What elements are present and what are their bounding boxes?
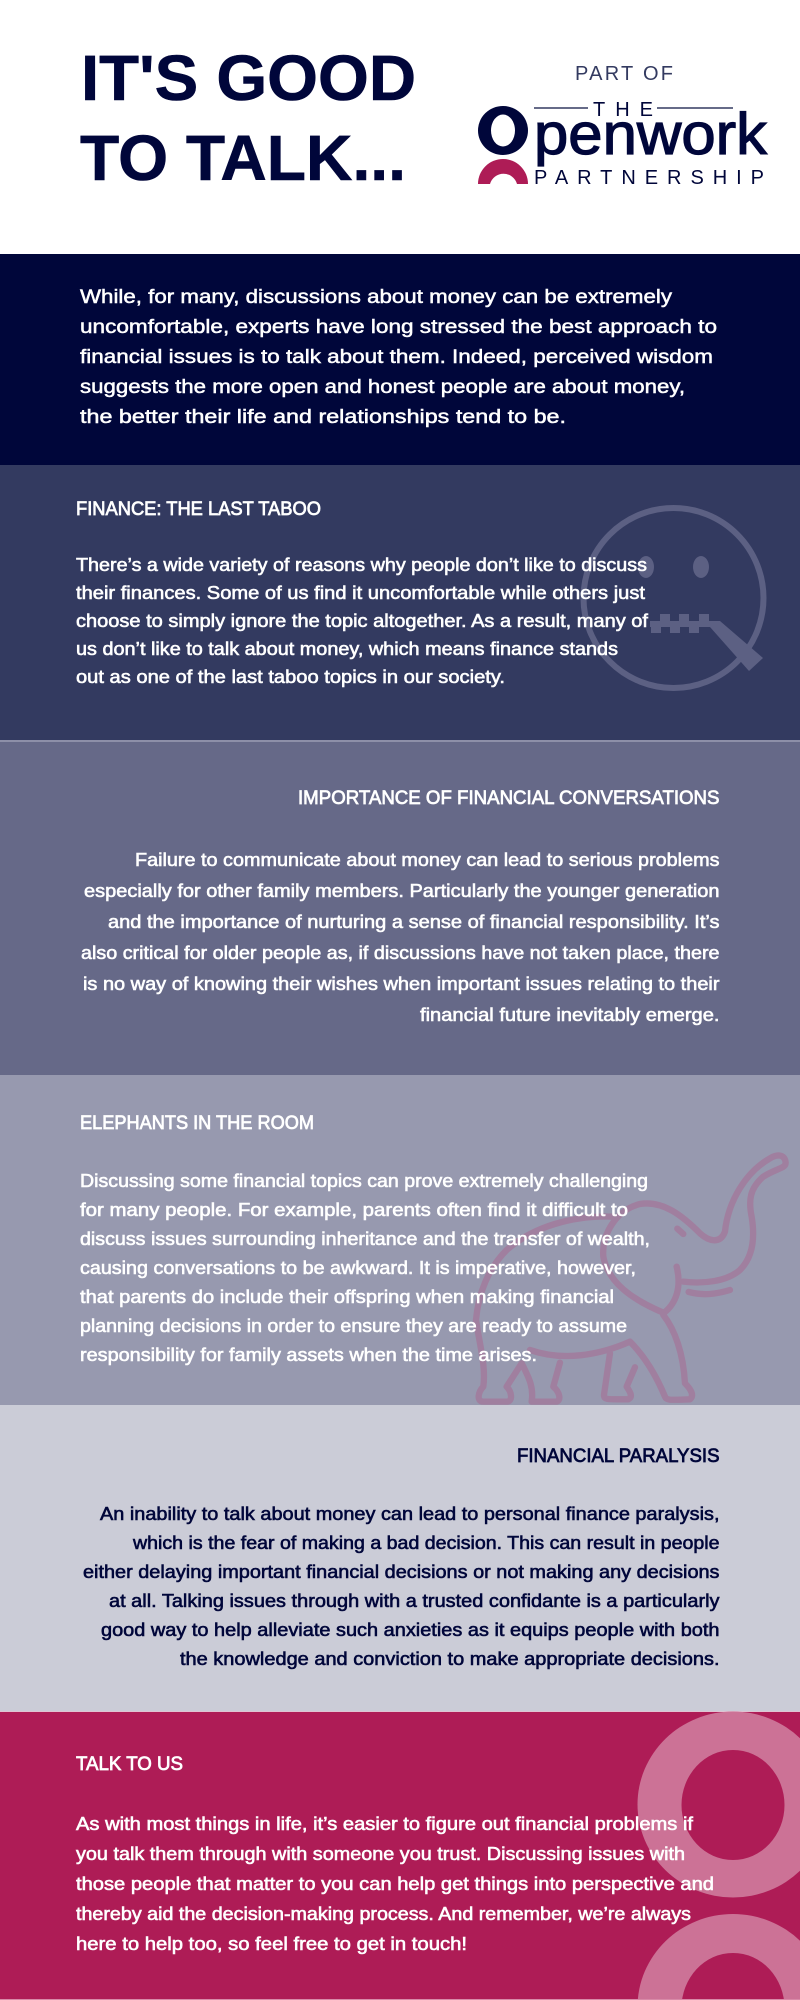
body text: out as one of the last taboo topics in our society. <box>76 666 505 687</box>
heading: FINANCIAL PARALYSIS <box>517 1446 720 1467</box>
body text <box>76 1813 714 1954</box>
title <box>80 42 416 194</box>
panel: elephants in the room <box>0 1075 800 1405</box>
intro text: suggests the more open and honest people are about money, <box>80 376 685 398</box>
body text: which is the fear of making a bad decision. This can result in people <box>132 1532 719 1553</box>
body text: thereby aid the decision-making process. And remember, we’re always <box>76 1903 691 1924</box>
title: TO TALK... <box>80 122 406 194</box>
intro text: the better their life and relationships tend to be. <box>80 406 566 428</box>
panel: header <box>0 0 800 254</box>
body text: causing conversations to be awkward. It is imperative, however, <box>80 1257 636 1278</box>
intro text: financial issues is to talk about them. Indeed, perceived wisdom <box>80 346 713 368</box>
panel: financial paralysis <box>0 1405 800 1711</box>
body text: planning decisions in order to ensure they are ready to assume <box>80 1315 627 1336</box>
icon: lower ring <box>638 1914 800 2000</box>
logo: The Openwork Partnership: penwork <box>534 102 768 167</box>
body text <box>76 554 649 687</box>
body text: at all. Talking issues through with a trusted confidante is a particularly <box>109 1590 720 1611</box>
body text: those people that matter to you can help get things into perspective and <box>76 1873 714 1894</box>
panel: talk to us <box>0 1711 800 2000</box>
logo: The Openwork Partnership <box>478 63 768 189</box>
body text: also critical for older people as, if discussions have not taken place, there <box>81 942 720 963</box>
body text: responsibility for family assets when the time arises. <box>80 1344 537 1365</box>
body text: An inability to talk about money can lead to personal finance paralysis, <box>100 1503 720 1524</box>
body text: us don’t like to talk about money, which means finance stands <box>76 638 618 659</box>
body text <box>80 1170 650 1365</box>
heading: FINANCE: THE LAST TABOO <box>76 499 321 520</box>
body text: for many people. For example, parents often find it difficult to <box>80 1199 628 1220</box>
body text: Discussing some financial topics can prove extremely challenging <box>80 1170 648 1191</box>
body text: you talk them through with someone you trust. Discussing issues with <box>76 1843 685 1864</box>
body text: especially for other family members. Particularly the younger generation <box>84 880 720 901</box>
panel: introduction <box>0 254 800 465</box>
heading: TALK TO US <box>76 1754 183 1775</box>
panel: finance the last taboo <box>0 465 800 740</box>
body text: good way to help alleviate such anxieties as it equips people with both <box>101 1619 720 1640</box>
body text: There’s a wide variety of reasons why people don’t like to discuss <box>76 554 647 575</box>
icon: zipped mouth face <box>584 508 764 688</box>
title: IT'S GOOD <box>81 42 416 114</box>
logo: The Openwork Partnership: PARTNERSHIP <box>534 167 764 189</box>
body text: that parents do include their offspring when making financial <box>80 1286 614 1307</box>
icon: elephant <box>476 1155 786 1402</box>
body text: Failure to communicate about money can lead to serious problems <box>135 849 720 870</box>
logo: The Openwork Partnership: THE <box>593 99 653 121</box>
body text: their finances. Some of us find it uncomfortable while others just <box>76 582 645 603</box>
body text: financial future inevitably emerge. <box>420 1004 720 1025</box>
body text: discuss issues surrounding inheritance and the transfer of wealth, <box>80 1228 650 1249</box>
body text: and the importance of nurturing a sense of financial responsibility. It’s <box>108 911 720 932</box>
body text: is no way of knowing their wishes when important issues relating to their <box>83 973 720 994</box>
body text: the knowledge and conviction to make appropriate decisions. <box>180 1648 720 1669</box>
intro text: While, for many, discussions about money can be extremely <box>80 286 672 308</box>
intro text: uncomfortable, experts have long stressed the best approach to <box>80 316 717 338</box>
body text <box>81 849 720 1025</box>
heading: IMPORTANCE OF FINANCIAL CONVERSATIONS <box>298 788 720 809</box>
intro text <box>80 286 717 428</box>
logo: The Openwork Partnership: PART OF <box>575 63 673 85</box>
icon: upper ring <box>638 1712 800 1898</box>
body text: either delaying important financial decisions or not making any decisions <box>83 1561 720 1582</box>
body text: As with most things in life, it’s easier to figure out financial problems if <box>76 1813 694 1834</box>
panel: importance of financial conversations <box>0 742 800 1075</box>
heading: ELEPHANTS IN THE ROOM <box>80 1113 314 1134</box>
body text <box>83 1503 720 1669</box>
body text: choose to simply ignore the topic altogether. As a result, many of <box>76 610 649 631</box>
body text: here to help too, so feel free to get in touch! <box>76 1933 467 1954</box>
